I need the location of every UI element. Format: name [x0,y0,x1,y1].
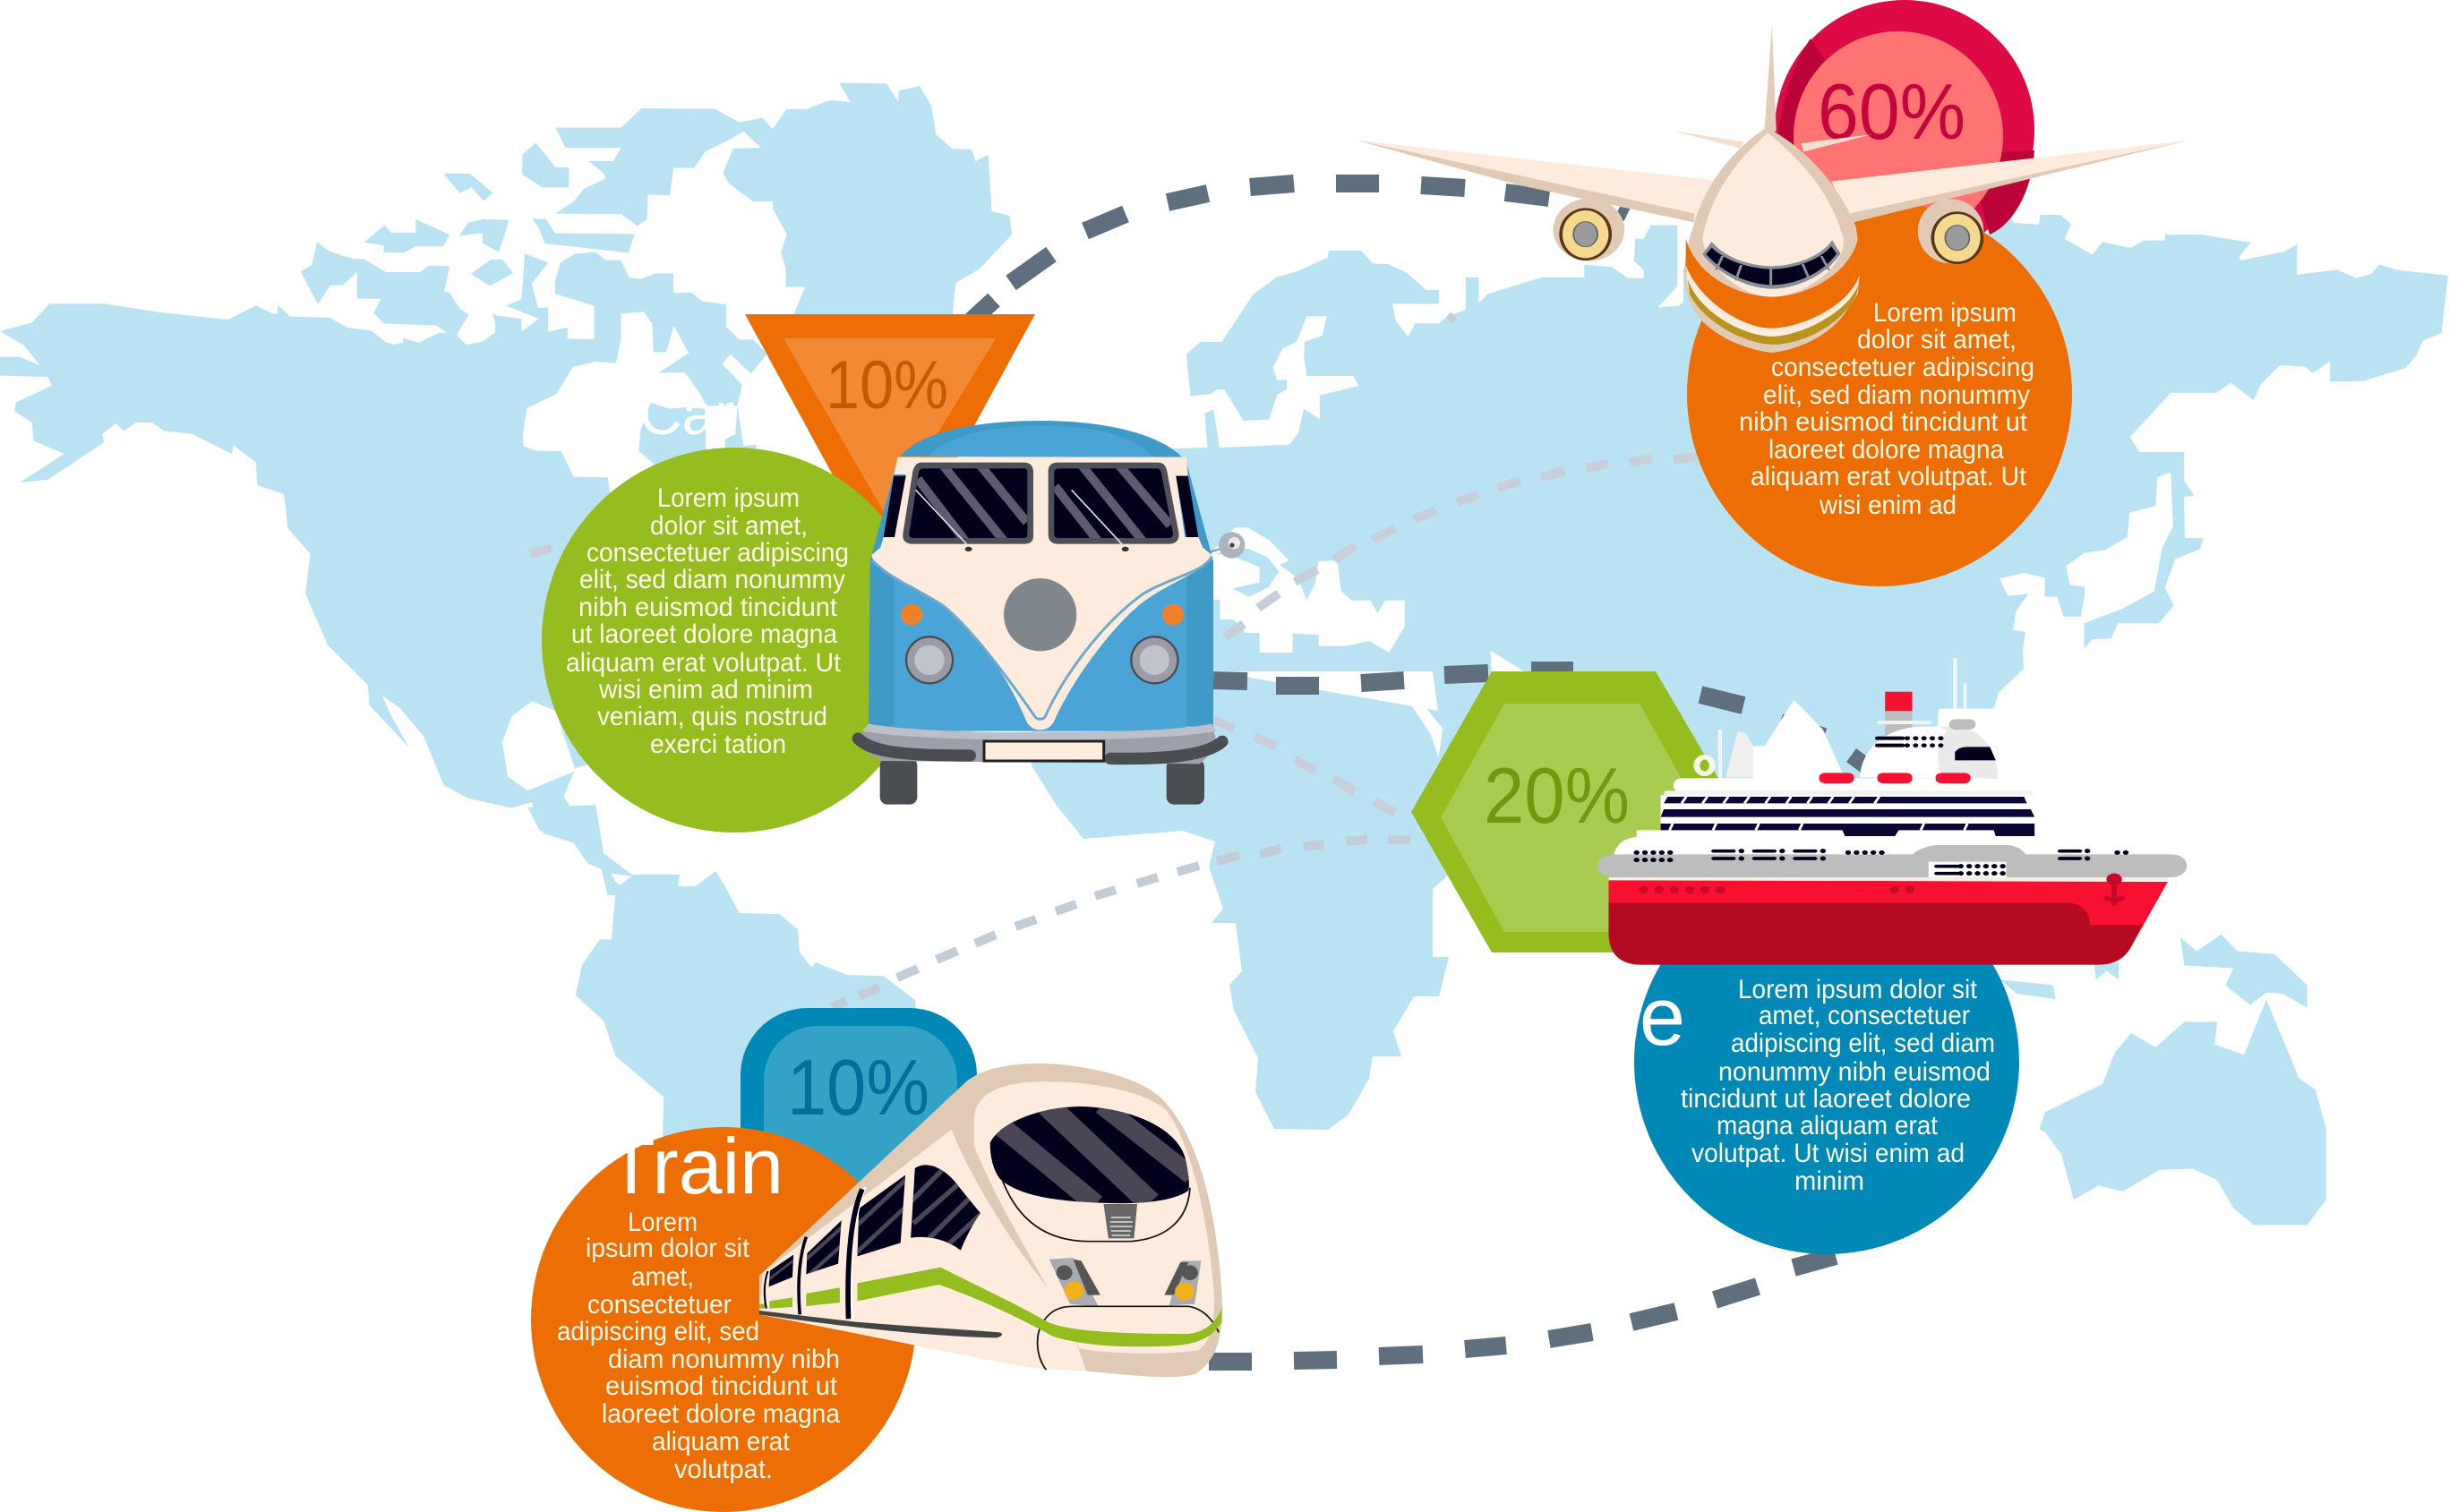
land: Asia interior [1433,233,2059,895]
panel: car description: consectetuer adipiscing [587,538,849,568]
panel: ship description: amet, consectetuer [1759,1001,1970,1030]
panel: ship description: Lorem ipsum dolor sit [1738,975,1978,1004]
panel: train description: volutpat. [674,1455,773,1484]
panel: train description: ipsum dolor sit [586,1234,750,1263]
panel: ship description [1634,869,2019,1254]
panel: ship description: magna aliquam erat [1717,1111,1939,1140]
badge: 20% green hexagon [1411,671,1738,952]
land: Africa [1032,662,1469,1130]
panel: plane description: laoreet dolore magna [1768,435,2004,465]
panel: car description: wisi enim ad minim [598,675,813,705]
route: dark dashes from train to ship panel [1209,1256,1836,1362]
panel: car description: exerci tation [650,730,786,759]
badge: 10% orange triangle [745,314,1035,580]
panel: plane description: wisi enim ad [1819,491,1957,520]
land: North America lower part [0,303,800,895]
badge: 10% orange triangle: 10% [826,347,948,423]
heading: Cruise (mostly hidden): Cruise [1447,971,1685,1063]
icon: high-speed train [759,1064,1222,1377]
panel: ship description: nonummy nibh euismod [1718,1057,1991,1087]
panel: ship description: tincidunt ut laoreet dolore [1681,1084,1971,1114]
land: Europe and western Asia [1155,226,1710,671]
heading: Train: Train [607,1122,784,1210]
panel: ship description: minim [1794,1166,1864,1196]
panel: train description [531,1122,916,1512]
land: eastern Asia [1892,215,2448,726]
panel: car description: elit, sed diam nonummy [579,565,845,594]
route: dark dashes from car to plane [972,184,1628,320]
land: southern seas, Australia and islands [1390,650,2326,1226]
panel: plane description [1687,201,2072,586]
panel: plane description: aliquam erat volutpat. Ut [1751,462,2027,491]
heading: Car (mostly hidden): Car [639,380,734,447]
panel: ship description: adipiscing elit, sed diam [1731,1029,1995,1058]
land: Central and South America [527,805,959,1173]
panel: plane description: nibh euismod tincidunt ut [1739,407,2028,437]
panel: train description: aliquam erat [652,1427,791,1456]
panel: car description: aliquam erat volutpat. Ut [566,648,842,678]
panel: car description [542,448,927,833]
badge: 60% red circle: 60% [1818,67,1965,156]
land: Canada, Arctic islands and Greenland [269,83,1012,492]
icon: cruise ship [1597,658,2187,965]
panel: train description: diam nonummy nibh [608,1345,840,1374]
panel: train description: Lorem [628,1208,698,1237]
panel: train description: euismod tincidunt ut [605,1371,838,1401]
panel: train description: consectetuer [587,1290,732,1320]
panel: ship description: volutpat. Ut wisi enim ad [1691,1139,1965,1168]
panel: car description: dolor sit amet, [650,511,808,541]
icon: camper van [858,421,1245,805]
panel: car description: nibh euismod tincidunt [578,593,838,622]
route: light dashes from car to hexagon [1213,720,1395,813]
panel: car description: veniam, quis nostrud [597,702,827,731]
world map [0,83,2448,1226]
panel: train description: laoreet dolore magna [602,1399,840,1429]
badge: 60% red circle [1775,0,2034,260]
panel: train description: amet, [631,1262,694,1292]
route: dark dashes from car to ship [1213,671,1863,767]
panel: plane description: elit, sed diam nonummy [1763,380,2030,410]
route: light dashes from train to hexagon [832,840,1410,1007]
badge: 10% blue rounded box [741,1008,977,1214]
panel: car description: ut laoreet dolore magna [571,619,837,649]
route: light dash stub left of car panel [530,548,552,554]
badge: 20% green hexagon: 20% [1484,751,1630,840]
route: light dashes from car to plane panel [1225,315,1697,637]
panel: plane description: Lorem ipsum [1873,298,2017,328]
panel: car description: Lorem ipsum [657,483,800,513]
icon: airplane [1357,25,2188,353]
panel: train description: adipiscing elit, sed [557,1317,759,1346]
panel: plane description: consectetuer adipiscing [1771,353,2034,382]
badge: 10% blue rounded box: 10% [787,1043,929,1132]
panel: plane description: dolor sit amet, [1857,325,2017,355]
